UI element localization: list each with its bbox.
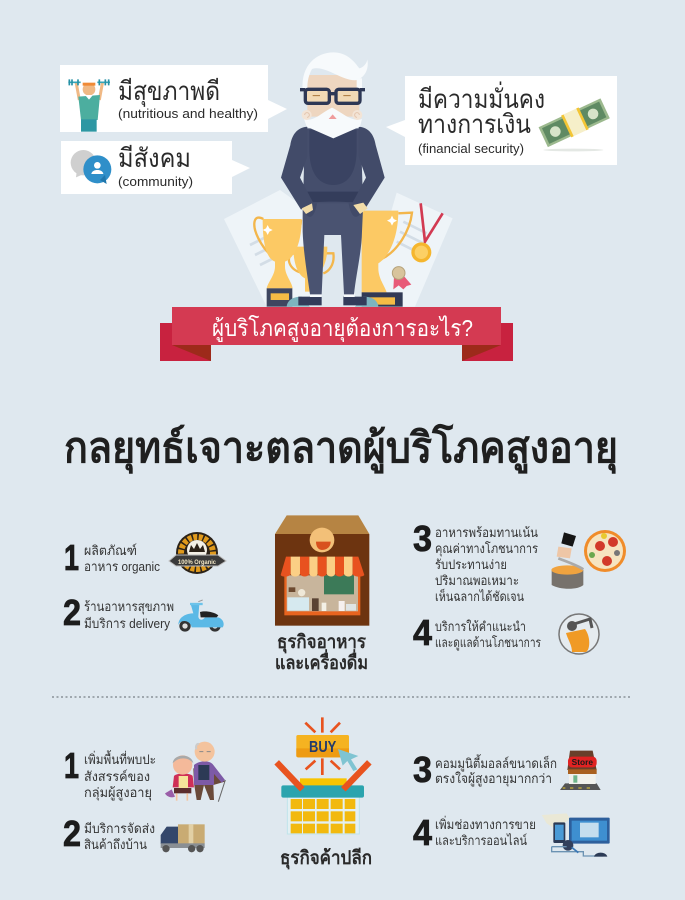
banner ribbon: [160, 307, 513, 361]
item 4 text: บริการให้คำแนะนำ: [435, 619, 526, 634]
icon: man lifting dumbbells: [68, 79, 110, 132]
icon: delivery truck: [161, 824, 205, 852]
number 2: 2: [63, 813, 81, 854]
item 3 text: [435, 754, 557, 787]
heading: food and beverage business: [275, 632, 368, 674]
panel: financial callout: [386, 76, 617, 165]
item 3 text: [435, 525, 538, 604]
item 1 text: อาหาร organic: [84, 559, 160, 574]
icon: organic badge: [169, 532, 226, 574]
section: food and beverage left items: [63, 532, 226, 633]
number 1: 1: [64, 537, 79, 578]
icon: shopping basket with buy button: BUY: [309, 739, 336, 756]
section: food and beverage right items: [413, 518, 626, 654]
item 2 text: ร้านอาหารสุขภาพ: [84, 599, 174, 615]
item 1 text: เพิ่มพื้นที่พบปะ: [84, 750, 156, 767]
number 3: 3: [413, 749, 432, 790]
item 4 text: เพิ่มช่องทางการขาย: [435, 816, 536, 832]
item 1 text: กลุ่มผู้สูงอายุ: [84, 785, 152, 801]
heading: food and beverage business: ธุรกิจอาหาร: [277, 632, 367, 654]
icon: canned food and hand: [551, 532, 583, 589]
icon: elderly couple: [165, 742, 225, 802]
number 4: 4: [413, 612, 432, 653]
text: healthy subtitle: (nutritious and healthy): [118, 107, 258, 121]
heading: financial line 2: ทางการเงิน: [418, 109, 531, 139]
icon: small store: Store: [572, 758, 594, 767]
number 2: 2: [63, 592, 81, 633]
icon: organic badge: 100% Organic: [178, 559, 216, 566]
icon: pizza: [584, 530, 626, 572]
banner text: ผู้บริโภคสูงอายุต้องการอะไร?: [212, 315, 473, 342]
item 3 text: เห็นฉลากได้ชัดเจน: [435, 587, 524, 604]
item 2 text: มีบริการจัดส่ง: [84, 821, 155, 836]
item 2 text: [84, 821, 155, 852]
item 3 text: คอมมูนิตี้มอลล์ขนาดเล็ก: [435, 754, 557, 772]
section: retail left items: [63, 742, 225, 854]
number 3: 3: [413, 518, 432, 559]
main title: กลยุทธ์เจาะตลาดผู้บริโภคสูงอายุ: [64, 423, 618, 474]
icon: online devices: [542, 813, 610, 857]
item 4 text: [435, 816, 536, 848]
icon: shopping basket with buy button: [277, 717, 369, 834]
number 4: 4: [413, 812, 432, 853]
heading: financial line 1: มีความมั่นคง: [418, 81, 545, 114]
item 3 text: คุณค่าทางโภชนาการ: [435, 541, 538, 557]
item 1 text: ผลิตภัณฑ์: [84, 543, 137, 558]
item 1 text: [84, 543, 160, 574]
item 2 text: [84, 599, 174, 631]
icon: food shop: [275, 515, 369, 626]
heading: community: มีสังคม: [118, 143, 191, 173]
item 2 text: สินค้าถึงบ้าน: [84, 837, 147, 852]
panel: healthy callout: [60, 65, 287, 132]
medal: [392, 203, 443, 289]
item 4 text: และบริการออนไลน์: [435, 833, 527, 848]
item 3 text: ปริมาณพอเหมาะ: [435, 573, 519, 588]
text: financial subtitle: (financial security): [418, 142, 524, 156]
item 4 text: และดูแลด้านโภชนาการ: [435, 635, 541, 651]
heading: retail business: ธุรกิจค้าปลีก: [280, 847, 372, 870]
item 3 text: รับประทานง่าย: [435, 557, 507, 572]
icon: money bundle: [538, 97, 610, 151]
item 2 text: มีบริการ delivery: [84, 616, 170, 631]
text: community subtitle: (community): [118, 175, 193, 189]
item 3 text: อาหารพร้อมทานเน้น: [435, 525, 538, 540]
item 3 text: ตรงใจผู้สูงอายุมากกว่า: [435, 771, 552, 787]
section: retail right items: [413, 749, 610, 857]
icon: chat bubbles: [71, 150, 111, 184]
illustration: old man with trophies: [224, 52, 453, 307]
icon: small store: [560, 751, 601, 790]
panel: community callout: [61, 141, 250, 194]
icon: scooter: [178, 600, 224, 632]
item 1 text: สังสรรค์ของ: [84, 769, 150, 784]
item 4 text: [435, 619, 541, 651]
icon: nutrition advisor: [559, 614, 599, 654]
heading: healthy: มีสุขภาพดี: [118, 76, 220, 107]
number 1: 1: [64, 745, 79, 786]
heading: food and beverage business: และเครื่องดื่ม: [275, 649, 368, 674]
item 1 text: [84, 750, 156, 801]
